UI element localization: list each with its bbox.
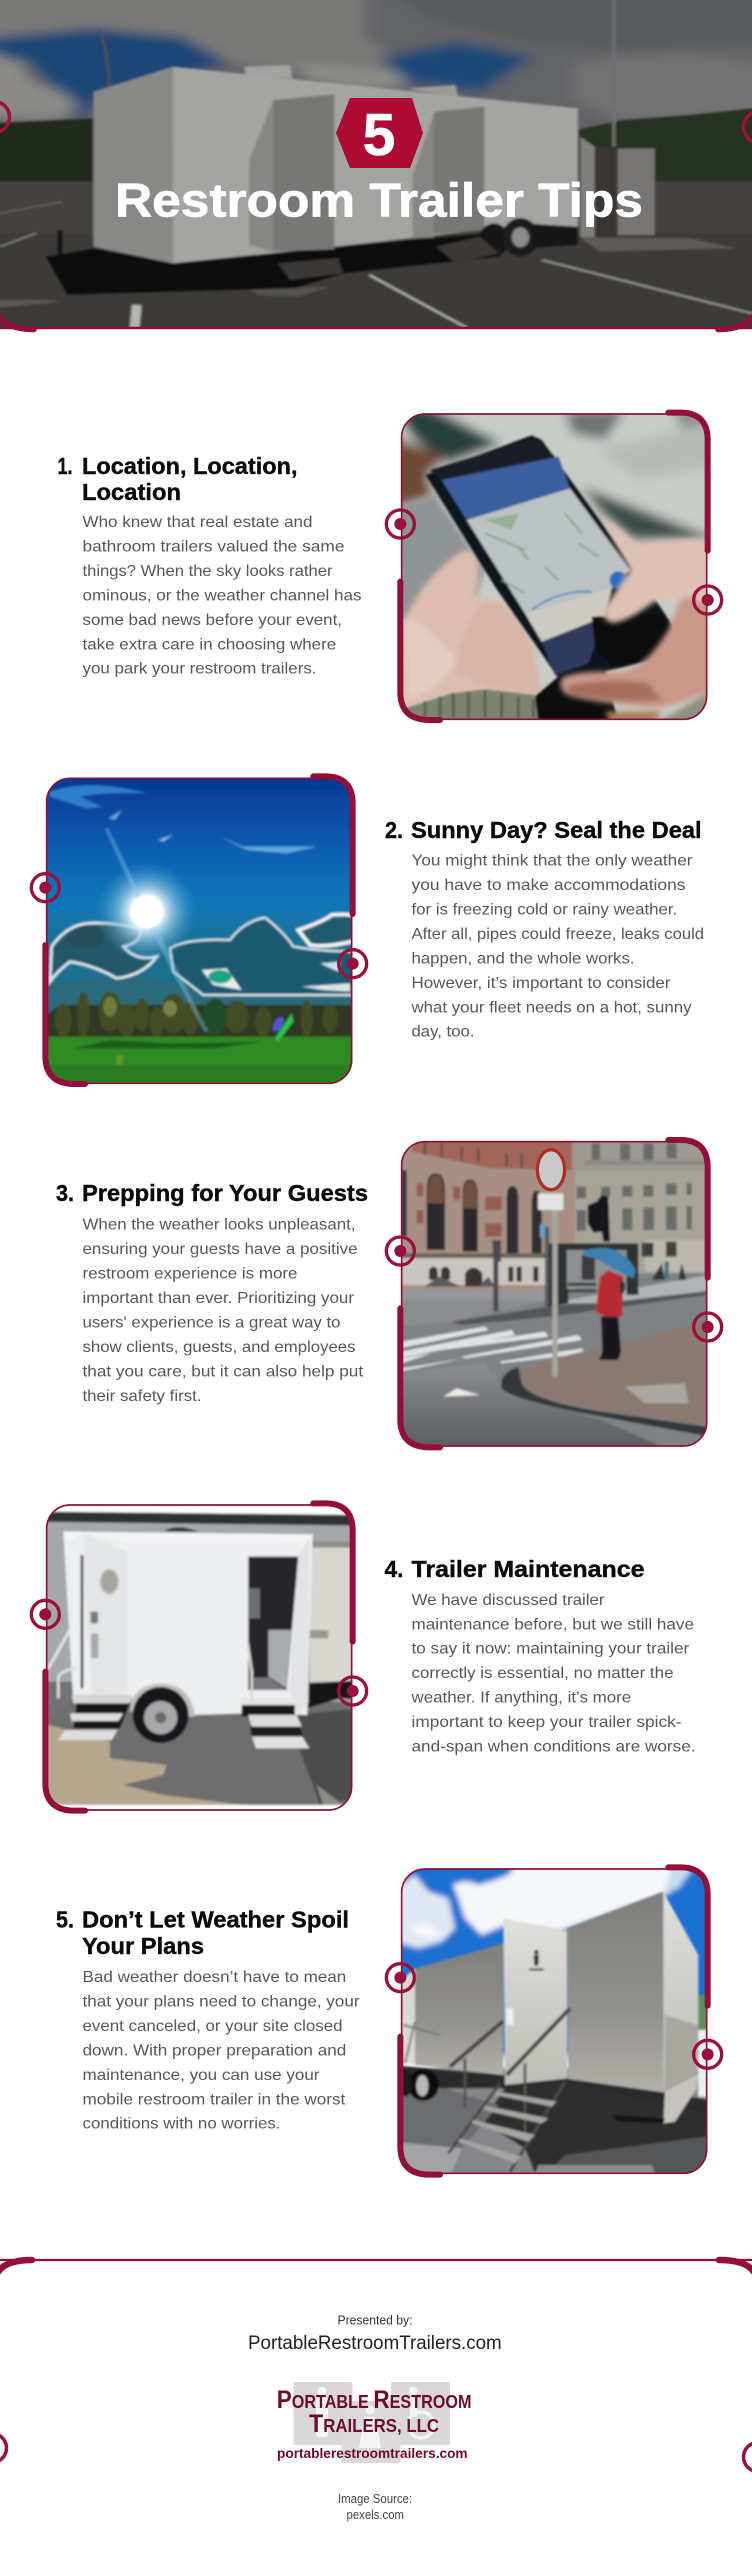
company logo [277,2382,472,2463]
tip 2 body: what your fleet needs on a hot, sunny [410,999,692,1016]
tip 4 heading: 4. [384,1556,404,1582]
tip 2 body: for is freezing cold or rainy weather. [412,902,677,918]
traffic sign [537,1150,565,1190]
tip 4 body [410,1592,696,1756]
tip 5 body: event canceled, or your site closed [82,2018,342,2035]
tip 1 body: take extra care in choosing where [82,636,336,653]
tip 2 body [410,853,704,1041]
tip 4 body: We have discussed trailer [412,1592,604,1609]
tip 3 body: that you care, but it can also help put [82,1363,364,1380]
tip 5 body: mobile restroom trailer in the worst [82,2091,346,2108]
image source: Image Source: [338,2492,412,2506]
tip 1 body [82,514,362,678]
tip 3 body: ensuring your guests have a positive [82,1241,358,1258]
logo wordmark [277,2386,472,2461]
tip 2 body: After all, pipes could freeze, leaks could [412,926,704,943]
presented by: Presented by: [338,2314,412,2328]
tip 4 body: and-span when conditions are worse. [412,1738,696,1756]
tip 5 text [56,1906,360,2133]
image source: pexels.com [346,2508,404,2522]
tip 1 body: you park your restroom trailers. [82,661,316,678]
tip 3 heading: 3. [56,1180,74,1206]
tip 5 heading [56,1906,349,1959]
tip 4 photo: white restroom trailer [31,1495,367,1822]
tip 5 body: that your plans need to change, your [82,1994,360,2010]
footer top rule and corner arcs [0,2260,752,2472]
rain photo frame with rings [386,1140,722,1447]
tip 3 text [56,1180,368,1405]
tip 2 body: day, too. [412,1024,474,1041]
phone photo frame with rings [386,413,722,720]
sun photo frame with rings [31,776,367,1084]
tip 3 body: users' experience is a great way to [82,1314,341,1332]
tip 4 body: important to keep your trailer spick- [412,1714,682,1731]
tip 4 body: maintenance before, but we still have [412,1616,694,1633]
website: PortableRestroomTrailers.com [248,2332,502,2354]
tip 4 heading: Trailer Maintenance [412,1556,644,1582]
hexagon badge with number 5: 5 [363,102,395,168]
tip 5 heading: Don’t Let Weather Spoil [82,1906,349,1932]
tip 1 body: ominous, or the weather channel has [82,587,362,604]
tip 1 body: Who knew that real estate and [82,514,312,531]
tip 5 photo: large restroom trailer with stairs [378,1848,732,2182]
banner bottom rule and corner arcs [0,102,752,330]
tip 1 photo: phone with map in hands [384,410,724,723]
tip 3 heading: Prepping for Your Guests [82,1180,368,1206]
tip 1 heading [58,453,298,505]
tip 4 body: correctly is essential, no matter the [412,1665,674,1682]
banner photo: restroom trailer in parking lot [0,0,752,335]
tip 4 body: weather. If anything, it’s more [410,1690,631,1707]
tip 2 text [385,817,704,1041]
tip 1 heading: Location [82,479,181,505]
tip 5 body: down. With proper preparation and [82,2042,346,2059]
large trailer photo frame with rings [386,1867,722,2175]
tip 5 body: Bad weather doesn’t have to mean [82,1969,346,1986]
logo wordmark: PORTABLE RESTROOM [277,2386,472,2414]
trailer photo frame with rings [31,1503,367,1811]
banner header [0,0,752,335]
tip 1 text [58,453,362,678]
tip 1 heading: 1. [58,453,72,479]
tip 1 body: bathroom trailers valued the same [82,538,345,556]
tip 4 text [384,1556,696,1756]
tip 2 body: you have to make accommodations [412,877,686,894]
tip 3 body: important than ever. Prioritizing your [82,1290,354,1307]
tip 1 body: things? When the sky looks rather [82,563,332,580]
logo tiles [294,2382,450,2463]
tip 5 heading: 5. [56,1906,74,1932]
logo wordmark: TRAILERS, LLC [309,2410,439,2438]
footer panel [0,2260,752,2522]
logo wordmark: portablerestroomtrailers.com [277,2445,468,2461]
tip 2 heading: Sunny Day? Seal the Deal [411,817,702,843]
tip 5 heading: Your Plans [82,1933,204,1959]
tip 1 body: some bad news before your event, [82,612,342,629]
tip 2 body: However, it’s important to consider [412,975,670,992]
image source [338,2492,412,2522]
tip 3 body: When the weather looks unpleasant, [82,1217,356,1234]
tip 2 body: happen, and the whole works. [412,950,634,967]
title: Restroom Trailer Tips [115,174,643,226]
tip 2 photo: sun in blue sky over meadow [31,765,367,1090]
tip 3 body [82,1217,364,1405]
hexagon badge with number 5 [336,98,423,168]
tip 2 body: You might think that the only weather [412,853,692,870]
tip 1 heading: Location, Location, [82,453,298,479]
tip 3 body: show clients, guests, and employees [82,1339,356,1356]
tip 5 body [82,1969,360,2133]
tip 5 body: maintenance, you can use your [82,2067,320,2084]
tip 2 heading: 2. [385,817,403,843]
tip 3 body: restroom experience is more [82,1266,298,1283]
tip 3 body: their safety first. [82,1388,202,1405]
tip 3 photo: person with umbrella in rain [386,1130,722,1457]
tip 5 body: conditions with no worries. [82,2116,280,2133]
tip 4 body: to say it now: maintaining your trailer [412,1641,689,1658]
